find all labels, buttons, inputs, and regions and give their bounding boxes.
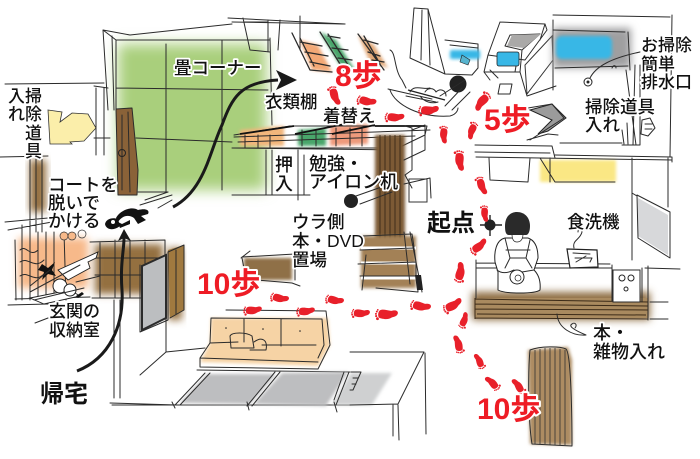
label: cleaning tools storage, right bbox=[585, 97, 655, 135]
label: cleaning tools storage, left bbox=[8, 87, 42, 161]
label: take off coat and hang: コートを bbox=[48, 175, 118, 195]
label: closet: 押 bbox=[275, 155, 293, 175]
label: easy-clean drain: 簡単 bbox=[641, 55, 675, 74]
sub: leader line bbox=[557, 314, 586, 335]
label: cleaning tools storage, left: 具 bbox=[25, 142, 42, 161]
icon: striped floor mat bbox=[528, 347, 572, 446]
panel: cleaning tool closet bbox=[0, 83, 110, 157]
label: books and DVD storage: 置場 bbox=[292, 250, 327, 270]
label: take off coat and hang: かける bbox=[48, 211, 100, 231]
icon: start point marker bbox=[480, 215, 502, 236]
label: changing clothes: 着替え bbox=[323, 106, 376, 126]
label: start point: 起点 bbox=[427, 210, 475, 237]
icon: kitchen window bbox=[632, 193, 670, 258]
panel: clothes shelves bbox=[292, 32, 388, 72]
sub: person washing dishes bbox=[495, 212, 540, 293]
label: clothes shelf: 衣類棚 bbox=[265, 92, 318, 112]
footprints: route bbox=[242, 84, 527, 396]
label: easy-clean drain bbox=[641, 36, 692, 92]
label: books and sundries storage: 本・ bbox=[593, 323, 629, 343]
icon: wooden door bbox=[116, 108, 138, 195]
label: entrance storage: 玄関の bbox=[49, 302, 100, 321]
label: tatami corner: 畳コーナー bbox=[174, 58, 262, 78]
sub: dishwasher bbox=[567, 229, 598, 268]
sub: counter lines bbox=[476, 260, 680, 320]
panel: table bbox=[350, 352, 426, 440]
step count: 5 steps: 5歩 bbox=[484, 104, 531, 137]
panel: bathtub bbox=[553, 15, 672, 162]
panel: kitchen back counter bbox=[476, 157, 672, 260]
step count: 10 steps, left: 10歩 bbox=[197, 268, 260, 301]
sub: book storage strip bbox=[472, 292, 650, 320]
icon: entry door bbox=[140, 245, 184, 332]
label: books and sundries storage: 雑物入れ bbox=[593, 342, 665, 362]
sub: stove bbox=[613, 270, 640, 302]
panel: sofa bbox=[197, 310, 350, 372]
label: books and sundries storage bbox=[593, 323, 665, 362]
panel: washroom vanity bbox=[475, 20, 566, 158]
label: study and ironing desk: アイロン机 bbox=[309, 172, 398, 192]
label: study and ironing desk bbox=[309, 154, 398, 192]
panel: laundry sink and person bbox=[388, 8, 480, 116]
label: cleaning tools storage, left: 掃 bbox=[25, 87, 42, 106]
panel: overhead shelf and closet bbox=[232, 124, 430, 200]
panel: floor rugs bbox=[172, 372, 392, 412]
label: books and DVD storage: 本・DVD bbox=[292, 231, 364, 251]
label: easy-clean drain: お掃除 bbox=[641, 36, 692, 55]
label: cleaning tools storage, right: 入れ bbox=[585, 115, 620, 135]
arrow: coming home bbox=[77, 229, 131, 371]
label: closet bbox=[275, 155, 293, 194]
label: take off coat and hang bbox=[48, 175, 118, 231]
label: books and DVD storage bbox=[292, 212, 364, 270]
label: closet: 入 bbox=[275, 174, 293, 194]
label: cleaning tools storage, right: 掃除道具 bbox=[585, 97, 655, 117]
label: easy-clean drain: 排水口 bbox=[641, 73, 692, 92]
panel: tatami corner bbox=[103, 16, 345, 192]
icon: wall bookshelf bbox=[241, 251, 300, 286]
icon: coat hanger sketch bbox=[105, 192, 172, 229]
label: books and DVD storage: ウラ側 bbox=[292, 212, 344, 232]
label: cleaning tools storage, left: 入 bbox=[8, 87, 25, 106]
step count: 10 steps, bottom: 10歩 bbox=[477, 393, 540, 426]
panel: staircase bbox=[358, 232, 423, 292]
arrow: to tatami corner bbox=[173, 70, 297, 207]
label: cleaning tools storage, left: 除 bbox=[25, 105, 42, 124]
icon: desk lamp sketch bbox=[344, 180, 392, 208]
label: entrance storage: 収納室 bbox=[49, 321, 100, 340]
panel: kitchen counter with person bbox=[472, 212, 680, 335]
icon: wooden column bbox=[375, 125, 431, 240]
label: dishwasher: 食洗機 bbox=[567, 212, 620, 232]
label: study and ironing desk: 勉強・ bbox=[309, 154, 363, 174]
label: cleaning tools storage, left: れ bbox=[8, 105, 25, 124]
label: coming home: 帰宅 bbox=[40, 381, 88, 408]
panel: entrance storage room bbox=[5, 158, 350, 405]
step count: 8 steps: 8歩 bbox=[335, 60, 382, 93]
label: cleaning tools storage, left: 道 bbox=[25, 124, 42, 143]
label: take off coat and hang: 脱いで bbox=[48, 193, 100, 213]
label: entrance storage bbox=[49, 302, 100, 340]
